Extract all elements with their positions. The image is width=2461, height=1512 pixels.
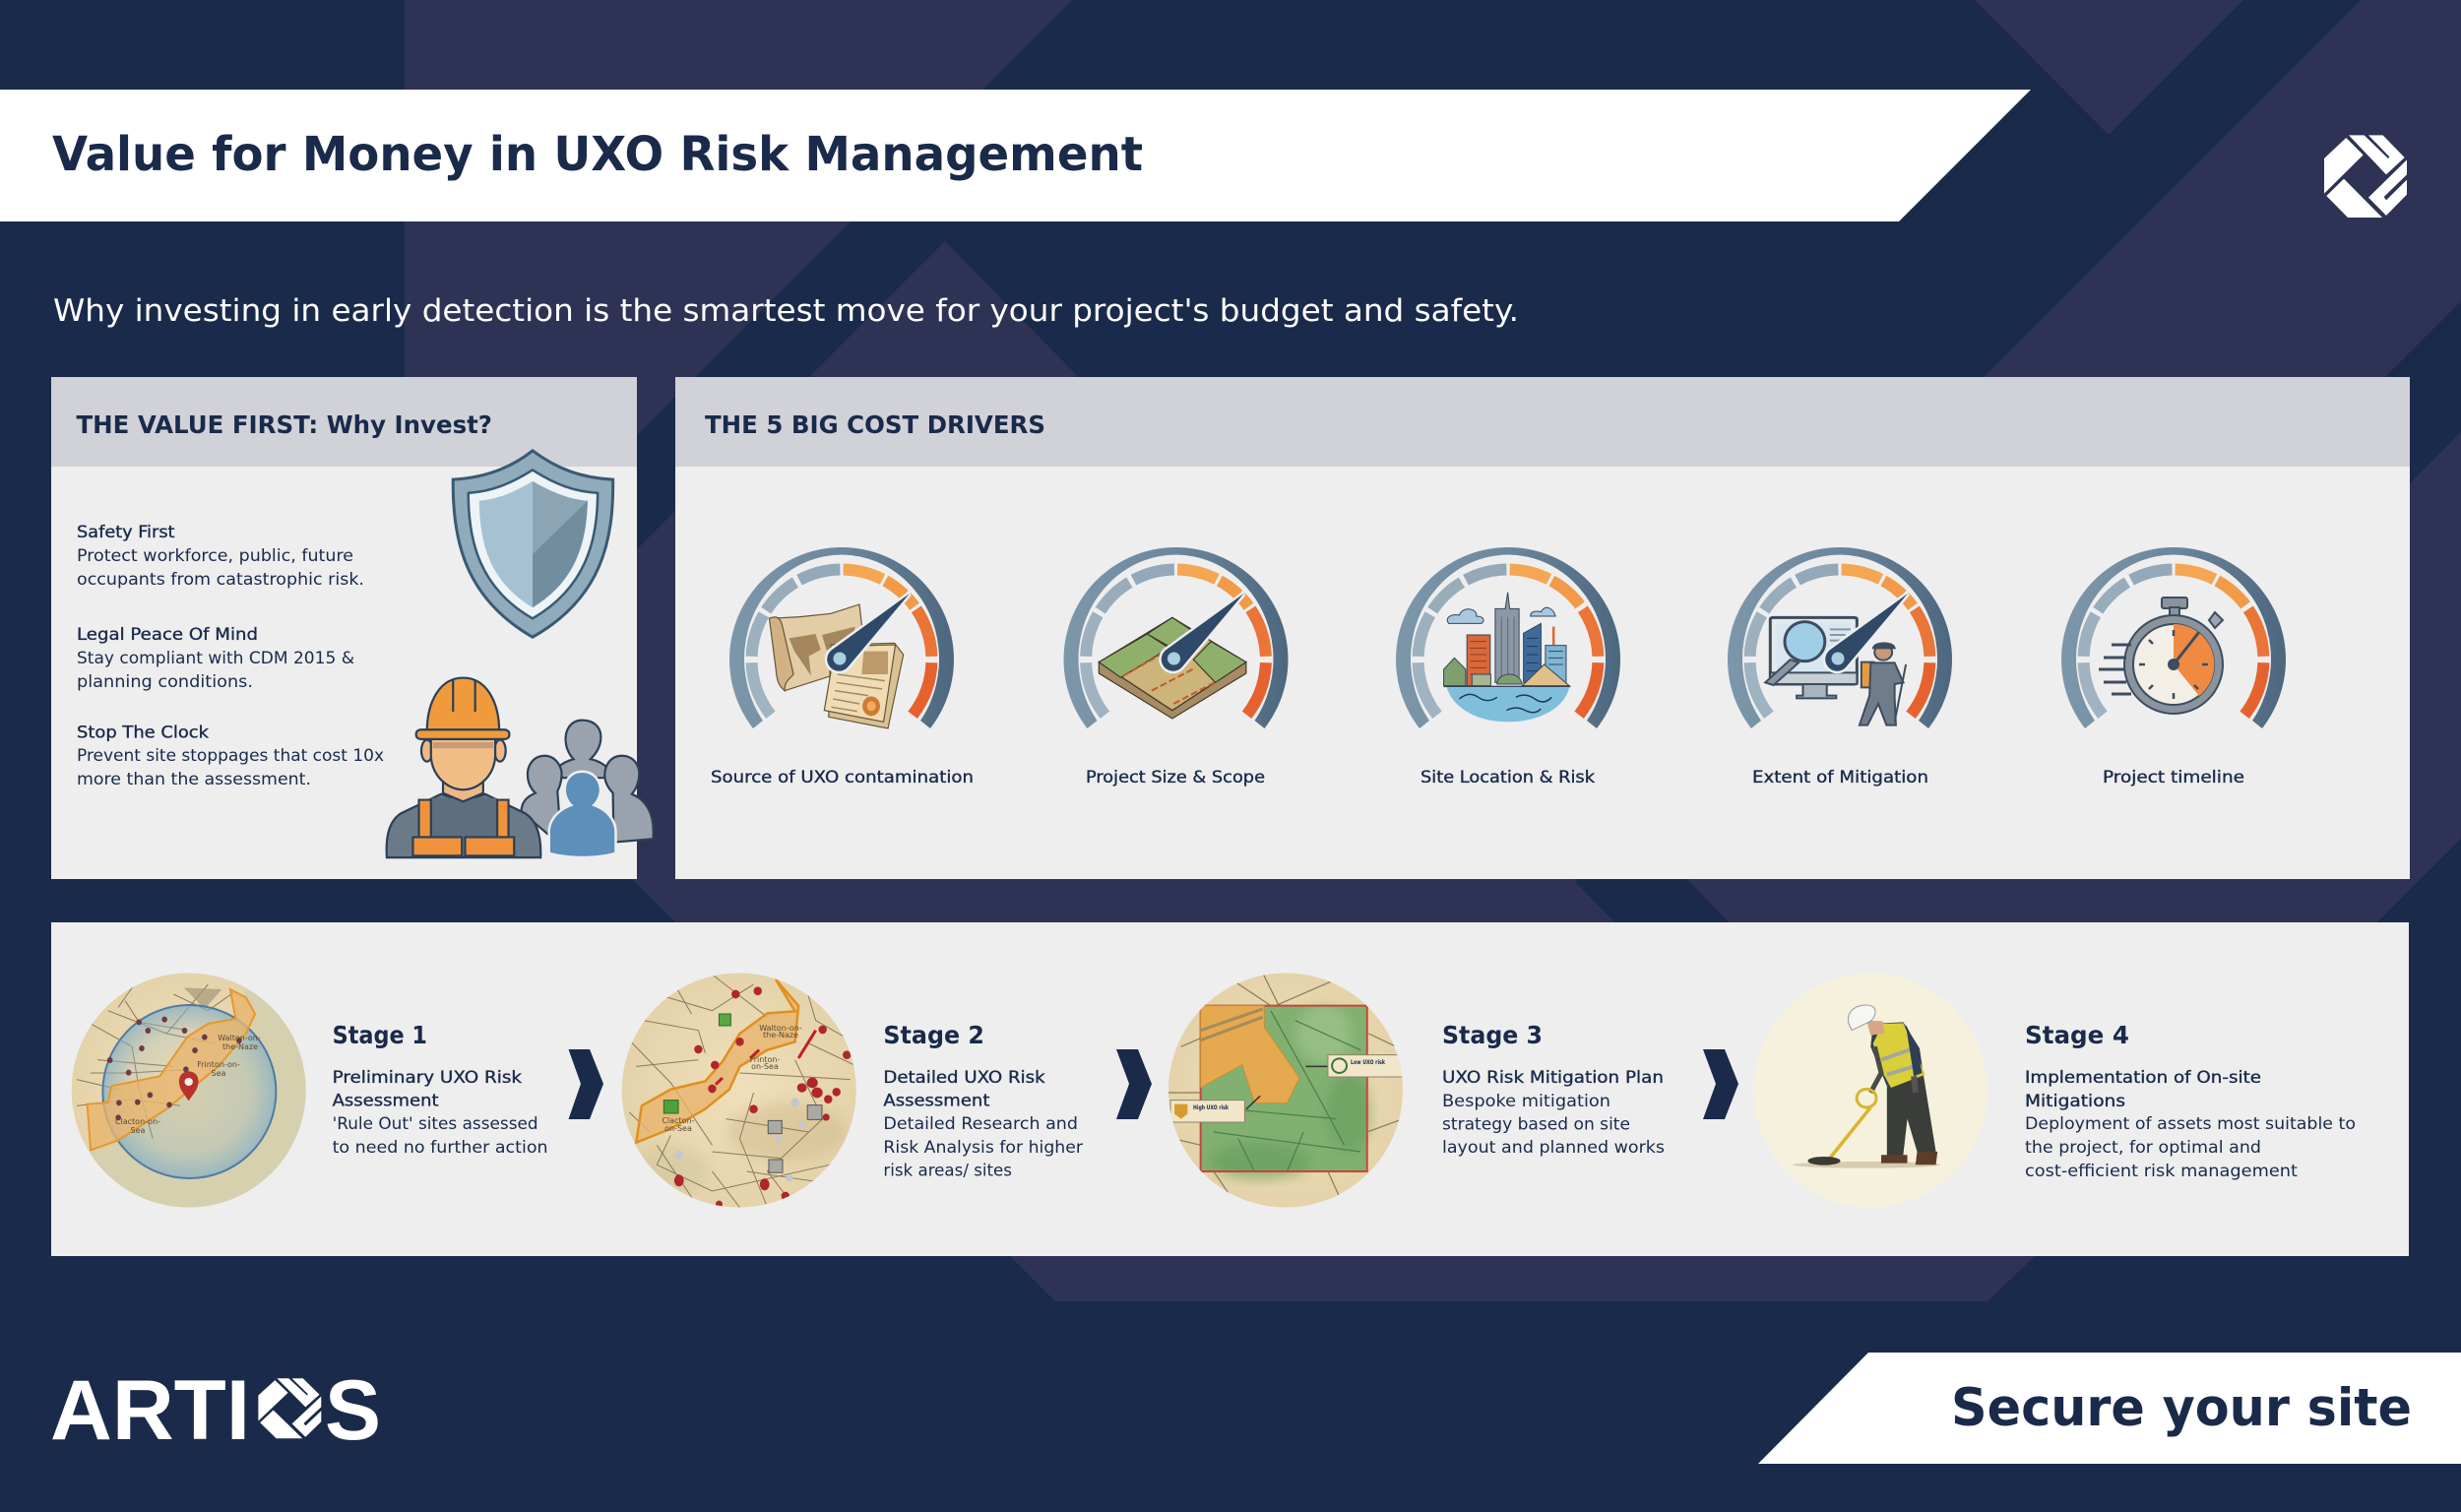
icon: shield xyxy=(453,451,613,637)
icon: artios emblem top right xyxy=(2324,135,2407,218)
icon: city on water xyxy=(1444,593,1570,722)
title banner xyxy=(0,90,2031,221)
stage 2 xyxy=(620,970,1083,1211)
text block: safety first: Protect workforce, public, future xyxy=(77,546,353,565)
text block: safety first xyxy=(77,523,364,589)
text block: stop the clock: Stop The Clock xyxy=(77,723,209,742)
illustration: worker with metal detector xyxy=(1753,973,1988,1207)
panel: the value first xyxy=(51,377,654,879)
map: stage 1: Frinton-on- xyxy=(197,1060,240,1069)
logo: artios: ARTI xyxy=(50,1363,250,1458)
label: Extent of Mitigation xyxy=(1752,768,1928,787)
heading: stage 4: Stage 4 xyxy=(2025,1021,2129,1049)
text block: legal peace of mind xyxy=(77,625,354,691)
map: stage 3: High UXO risk xyxy=(1193,1103,1229,1111)
stage 1 xyxy=(69,970,548,1211)
text block: stage 2 description: risk areas/ sites xyxy=(883,1162,1012,1180)
map: stage 2: on-Sea xyxy=(751,1062,779,1071)
driver: project size and scope xyxy=(1063,547,1288,787)
stage 4 xyxy=(1753,973,2356,1207)
map: stage 2: the-Naze xyxy=(763,1031,798,1040)
icon: isometric site plot xyxy=(1099,617,1246,719)
text block: stage 3 description: UXO Risk Mitigation Plan xyxy=(1442,1068,1664,1087)
text block: stage 2 description xyxy=(883,1068,1083,1180)
subtitle: Why investing in early detection is the smartest move for your project's budget and safety. xyxy=(53,293,1519,329)
logo: artios xyxy=(50,1363,381,1458)
text block: stage 2 description: Assessment xyxy=(883,1092,990,1110)
text block: stage 4 description: Deployment of assets most suitable to xyxy=(2025,1114,2356,1133)
map: stage 2: Walton-on- xyxy=(759,1024,802,1033)
text block: legal peace of mind: Stay compliant with CDM 2015 & xyxy=(77,649,354,667)
driver: site location and risk xyxy=(1396,547,1620,787)
icon: map and document xyxy=(770,604,904,728)
map: stage 2 xyxy=(620,970,861,1211)
text block: stage 2 description: Detailed UXO Risk xyxy=(883,1068,1045,1087)
map: stage 2: Frinton- xyxy=(750,1055,780,1064)
map: stage 1: Clacton-on- xyxy=(115,1117,160,1126)
stage 3 xyxy=(1165,970,1665,1211)
text block: stage 4 description: Mitigations xyxy=(2025,1092,2125,1110)
label: Site Location & Risk xyxy=(1420,768,1595,787)
map: stage 2: on-Sea xyxy=(664,1124,692,1133)
text block: stage 4 description: Implementation of On-site xyxy=(2025,1068,2261,1087)
heading: stage 1: Stage 1 xyxy=(333,1021,427,1049)
map: stage 1: Sea xyxy=(212,1069,226,1078)
call to action text: Secure your site xyxy=(1951,1378,2412,1438)
title: Value for Money in UXO Risk Management xyxy=(52,127,1143,182)
text block: stage 3 description xyxy=(1442,1068,1665,1157)
text block: stage 3 description: Bespoke mitigation xyxy=(1442,1092,1610,1110)
icon: worker and group xyxy=(387,678,654,857)
driver: project timeline xyxy=(2061,547,2286,787)
call to action banner xyxy=(1758,1353,2461,1464)
icon: stopwatch xyxy=(2099,598,2223,714)
text block: stop the clock: Prevent site stoppages that cost 10x xyxy=(77,746,384,765)
map: stage 1 xyxy=(69,970,310,1211)
arrow: stage 2 to 3 xyxy=(1116,1049,1152,1119)
text block: stop the clock xyxy=(77,723,384,788)
heading: cost drivers: THE 5 BIG COST DRIVERS xyxy=(705,410,1045,439)
heading: stage 2: Stage 2 xyxy=(883,1021,984,1049)
panel: the 5 big cost drivers xyxy=(675,377,2410,879)
label: Project Size & Scope xyxy=(1086,768,1265,787)
map: stage 2: Clacton- xyxy=(662,1116,695,1125)
driver: extent of mitigation xyxy=(1728,547,1952,787)
text block: stage 1 description xyxy=(333,1068,548,1157)
text block: stop the clock: more than the assessment. xyxy=(77,770,311,788)
text block: safety first: Safety First xyxy=(77,523,175,541)
text block: stage 1 description: Preliminary UXO Risk xyxy=(333,1068,522,1087)
text block: legal peace of mind: Legal Peace Of Mind xyxy=(77,625,258,644)
icon: monitor, magnifier and surveyor xyxy=(1765,617,1906,725)
map: stage 1: Sea xyxy=(131,1126,146,1135)
arrow: stage 1 to 2 xyxy=(569,1049,603,1119)
arrow: stage 3 to 4 xyxy=(1703,1049,1738,1119)
text block: stage 4 description: the project, for optimal and xyxy=(2025,1138,2261,1157)
heading: why invest: THE VALUE FIRST: Why Invest? xyxy=(77,410,492,439)
label: Project timeline xyxy=(2103,768,2244,787)
map: stage 3: Low UXO risk xyxy=(1351,1058,1385,1066)
text block: stage 1 description: to need no further action xyxy=(333,1138,548,1157)
map: stage 1: Walton-on- xyxy=(218,1034,261,1042)
text block: stage 3 description: layout and planned works xyxy=(1442,1138,1665,1157)
text block: legal peace of mind: planning conditions. xyxy=(77,672,253,691)
driver: source of uxo contamination xyxy=(711,547,974,787)
text block: stage 4 description xyxy=(2025,1068,2356,1180)
label: Source of UXO contamination xyxy=(711,768,974,787)
text block: stage 2 description: Detailed Research and xyxy=(883,1114,1078,1133)
panel: stages xyxy=(51,922,2409,1256)
text block: stage 1 description: Assessment xyxy=(333,1092,439,1110)
text block: stage 2 description: Risk Analysis for higher xyxy=(883,1138,1083,1157)
map: stage 3 xyxy=(1165,970,1408,1211)
heading: stage 3: Stage 3 xyxy=(1442,1021,1543,1049)
text block: stage 4 description: cost-efficient risk management xyxy=(2025,1162,2299,1180)
text block: stage 3 description: strategy based on site xyxy=(1442,1114,1630,1134)
text block: stage 1 description: 'Rule Out' sites assessed xyxy=(333,1114,538,1133)
logo: artios: S xyxy=(325,1363,381,1458)
text block: safety first: occupants from catastrophic risk. xyxy=(77,570,364,589)
map: stage 1: the-Naze xyxy=(222,1042,258,1051)
